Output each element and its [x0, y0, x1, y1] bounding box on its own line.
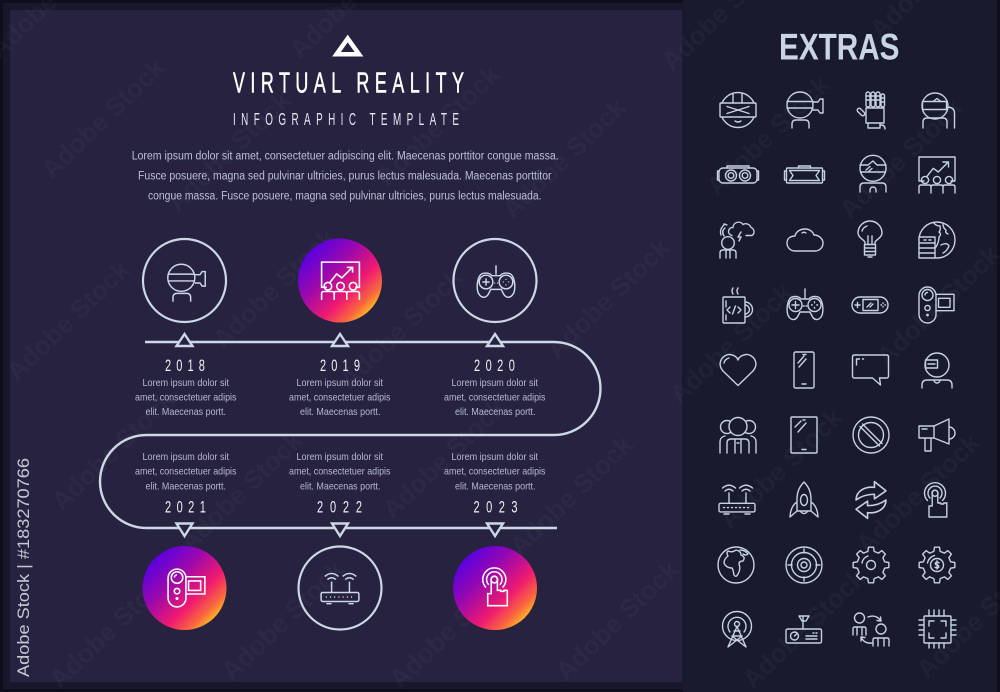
watermarks: Adobe Stock — [496, 92, 632, 224]
watermarks: Adobe Stock — [35, 52, 171, 184]
stock id vertical text: Adobe Stock | #183270766 — [14, 458, 33, 677]
timeline item: 2019 — [289, 238, 390, 418]
watermarks: Adobe Stock — [333, 262, 469, 394]
watermarks: Adobe Stock — [206, 222, 342, 354]
timeline item: 2020: amet, consectetuer adipis — [444, 392, 546, 404]
timeline item: 2019: 2019 — [320, 357, 360, 376]
watermarks: Adobe Stock — [663, 277, 799, 409]
icon: dollar gear — [919, 547, 955, 583]
timeline item: 2019: amet, consectetuer adipis — [289, 392, 390, 404]
icon: VR camera headset small — [787, 92, 823, 128]
watermarks: Adobe Stock — [736, 562, 872, 692]
watermarks: Adobe Stock — [370, 59, 506, 191]
timeline item: 2018: elit. Maecenas portt. — [146, 406, 226, 418]
icon: projector device — [786, 616, 822, 643]
timeline item: 2021: 2021 — [165, 498, 206, 517]
icon: group of people — [720, 418, 756, 453]
icon: no entry sign — [853, 417, 889, 453]
icon: handheld camera small — [919, 287, 954, 323]
timeline item: 2020: Lorem ipsum dolor sit — [452, 377, 538, 389]
intro paragraph: congue massa. Fusce posuere, magna sed pulvinar ultricies, purus lectus malesuada. — [148, 190, 542, 202]
timeline item: 2021: elit. Maecenas portt. — [146, 480, 226, 492]
watermarks: Adobe Stock — [45, 384, 181, 516]
icon: rocket — [790, 482, 818, 517]
timeline item: 2022: elit. Maecenas portt. — [300, 480, 380, 492]
timeline item: 2018: amet, consectetuer adipis — [135, 392, 236, 404]
timeline item: 2018 — [135, 239, 236, 418]
timeline item: 2021: Lorem ipsum dolor sit — [142, 451, 229, 463]
icon: person with glasses — [922, 353, 952, 388]
icon: person with headset and cable — [922, 93, 954, 128]
icon: heart — [720, 354, 756, 386]
panel: extras background — [683, 0, 997, 692]
timeline item: 2020: 2020 — [474, 357, 515, 376]
icon: tablet — [791, 417, 817, 453]
timeline item: 2021 — [135, 451, 236, 630]
watermarks: Adobe Stock — [376, 392, 512, 524]
timeline item: 2020 — [444, 239, 546, 418]
timeline item: 2022: Lorem ipsum dolor sit — [296, 451, 383, 463]
icon: person with ideas — [720, 222, 754, 258]
icon: VR camera headset — [168, 264, 205, 302]
timeline item: 2022: amet, consectetuer adipis — [289, 466, 390, 478]
watermarks: Adobe Stock — [503, 429, 639, 561]
timeline item: 2018: Lorem ipsum dolor sit — [142, 377, 229, 389]
icon: microchip — [919, 610, 956, 648]
icon: touch gesture — [483, 568, 507, 606]
intro paragraph: Lorem ipsum dolor sit amet, consectetuer adipiscing elit. Maecenas porttitor congue massa. — [132, 150, 559, 162]
watermarks: Adobe Stock — [215, 554, 351, 686]
watermarks: Adobe Stock — [540, 232, 676, 364]
icon: router small — [719, 485, 755, 514]
timeline item: 2023: amet, consectetuer adipis — [444, 466, 546, 478]
icon: touch gesture small — [924, 483, 947, 517]
icon: megaphone — [919, 419, 955, 451]
panel: extras icon grid — [718, 92, 956, 648]
watermarks: Adobe Stock — [713, 402, 849, 534]
timeline item: 2023: elit. Maecenas portt. — [455, 480, 536, 492]
icon: smartphone — [794, 352, 814, 388]
extras heading: EXTRAS — [779, 26, 900, 68]
logo triangle — [336, 38, 359, 54]
timeline item: 2019: elit. Maecenas portt. — [300, 406, 380, 418]
timeline item: 2023: 2023 — [474, 498, 518, 517]
icon: people exchange — [853, 613, 889, 646]
icon: refresh arrows — [856, 482, 886, 518]
icon: game controller — [477, 265, 515, 297]
icon: game controller small — [787, 289, 823, 320]
timeline path — [100, 342, 600, 528]
intro paragraph — [132, 150, 559, 202]
timeline item: 2021: amet, consectetuer adipis — [135, 466, 236, 478]
timeline item: 2022 — [289, 451, 390, 630]
panel: main timeline background — [10, 10, 682, 682]
icon: coffee mug with code — [723, 288, 752, 323]
timeline item: 2019: Lorem ipsum dolor sit — [296, 377, 383, 389]
watermarks: Adobe Stock — [161, 85, 297, 217]
intro paragraph: Fusce posuere, magna sed pulvinar ultricies, purus lectus malesuada. Maecenas porttitor — [138, 170, 552, 182]
subtitle: INFOGRAPHIC TEMPLATE — [233, 110, 459, 130]
icon: presentation chart small — [919, 157, 955, 193]
icon: presentation chart — [322, 262, 359, 300]
watermarks: Adobe Stock — [0, 254, 136, 386]
icon: VR glove — [856, 92, 885, 129]
icon: target — [786, 547, 822, 583]
watermarks: Adobe Stock — [43, 562, 179, 692]
icon: radio tower — [722, 612, 752, 647]
icon: gear — [853, 547, 889, 583]
icon: VR headset box — [784, 166, 824, 183]
icon: router — [321, 574, 359, 604]
icon: light bulb — [858, 221, 882, 257]
icon: globe — [718, 547, 754, 583]
watermarks: Adobe Stock — [173, 425, 309, 557]
icon: person with visor — [860, 155, 886, 192]
icon: handheld console — [852, 297, 888, 313]
icon: VR face — [720, 92, 756, 128]
timeline item: 2023 — [444, 451, 546, 630]
watermarks: Adobe Stock — [549, 554, 685, 686]
watermarks: Adobe Stock — [700, 69, 836, 201]
watermarks: Adobe Stock — [383, 562, 519, 692]
timeline item: 2020: elit. Maecenas portt. — [455, 406, 536, 418]
watermarks: Adobe Stock — [833, 92, 969, 224]
icon: cloud — [787, 229, 823, 251]
watermarks: Adobe Stock — [850, 427, 986, 559]
icon: VR goggles front — [718, 166, 758, 183]
timeline item: 2018: 2018 — [165, 357, 205, 376]
icon: speech bubble — [852, 355, 888, 385]
title: VIRTUAL REALITY — [233, 67, 464, 100]
timeline item: 2022: 2022 — [317, 498, 362, 517]
icon: handheld camera — [168, 569, 205, 607]
timeline item: 2023: Lorem ipsum dolor sit — [452, 451, 538, 463]
icon: globe with server — [919, 222, 955, 258]
